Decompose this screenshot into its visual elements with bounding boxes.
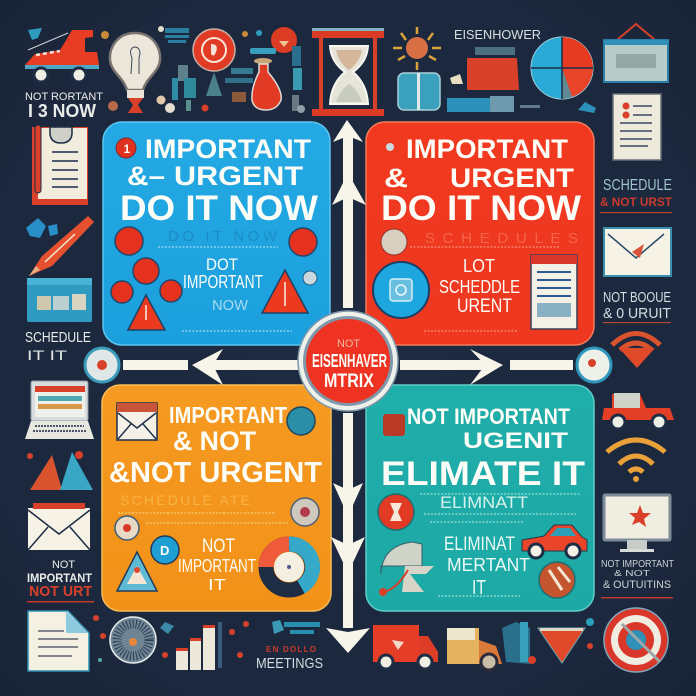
heading: important urgent do it now: IMPORTANT: [145, 134, 312, 164]
heading: not important urgent eliminate it: ELIMATE IT: [381, 455, 585, 493]
icon: window: [398, 73, 440, 110]
heading: important urgent do it now: URGENT: [450, 163, 575, 193]
label: not important right: NOT IMPORTANT: [601, 559, 674, 570]
icon: bottom clutter: [93, 615, 320, 662]
label: not schedule: [603, 289, 671, 323]
icon: red truck: [373, 625, 438, 669]
dotted rules: [420, 494, 580, 596]
icon: wifi orange: [607, 440, 665, 480]
label: schedule not urgent: [600, 177, 673, 213]
label: not schedule: & 0 URUIT: [603, 305, 671, 322]
heading: important urgent do it now: &: [384, 163, 408, 193]
heading: important not urgent: &NOT URGENT: [109, 457, 322, 489]
icon: bar chart: [176, 622, 222, 670]
text: not important it: NOT: [202, 536, 235, 557]
text: not important it: IT: [208, 577, 226, 594]
heading: important urgent do it now: &–: [127, 161, 165, 191]
icon: number badge: [116, 138, 136, 158]
text: lot schedule urgent: SCHEDDLE: [439, 277, 520, 297]
panel: not important not urgent (teal): [366, 385, 594, 611]
subheading: faded do it now: DO IT NOW: [168, 228, 278, 245]
icon: machine: [379, 542, 434, 596]
icon: triangle: [117, 552, 157, 591]
subheading: eliminate: ELIMNATT: [440, 493, 528, 512]
arrow: vertical axis down: [326, 413, 370, 653]
label: not important right: [601, 559, 674, 598]
label: meetings: MEETINGS: [256, 655, 323, 672]
icon: red diamond: [619, 348, 655, 368]
icon: blue badge: [287, 407, 315, 435]
icon: number badge: 1: [124, 142, 130, 156]
heading: not important urgent eliminate it: [381, 404, 585, 493]
heading: important not urgent: IMPORTANT: [169, 402, 287, 428]
label: not important now: I 3 NOW: [28, 101, 96, 121]
heading: important urgent do it now: URGENT: [174, 161, 304, 191]
label: not important right: & NOT: [614, 569, 650, 578]
arrow: horizontal right: [400, 349, 573, 385]
icon: triangles: [27, 451, 93, 490]
icon: red badge: [378, 494, 414, 530]
heading: important urgent do it now: [381, 134, 581, 228]
icon: envelope right: [604, 228, 671, 276]
icon: top-left decorative clutter: [28, 26, 305, 113]
label: not important not urgent: [27, 559, 94, 602]
text: lot schedule urgent: LOT: [463, 256, 495, 276]
center badge: eisenhower matrix: MTRIX: [324, 371, 374, 392]
icon: clipboard: [32, 125, 88, 205]
text: not important it: IMPORTANT: [178, 556, 256, 576]
icon: pen: [29, 216, 94, 276]
label: schedule it: SCHEDULE: [25, 329, 91, 346]
center badge: eisenhower matrix: [298, 311, 398, 411]
icon: teal card: [27, 278, 92, 322]
icon: small red circle: [271, 27, 297, 53]
panel: important not urgent (orange): [102, 385, 331, 611]
text: dot important now: [183, 255, 263, 314]
heading: important urgent do it now: DO IT NOW: [381, 189, 581, 228]
icon: truck top left: [25, 30, 99, 82]
icon: blue scraps: [26, 218, 58, 238]
icon: small grey badge: [303, 271, 317, 285]
text: lot schedule urgent: URENT: [457, 296, 512, 317]
text: eliminate important it: MERTANT: [447, 555, 530, 575]
icon: monitor: [604, 495, 670, 552]
icon: red badges: [111, 227, 317, 303]
subheading: faded schedules: SCHEDULES: [425, 230, 578, 247]
center badge: eisenhower matrix: NOT: [337, 338, 360, 350]
arrow: vertical axis up: [332, 120, 366, 308]
text: dot important now: IMPORTANT: [183, 272, 263, 292]
heading: not important urgent eliminate it: NOT IMPORTANT: [407, 404, 570, 429]
heading: important not urgent: [109, 402, 322, 489]
heading: important urgent do it now: IMPORTANT: [406, 134, 569, 164]
label: schedule it: IT IT: [27, 347, 68, 363]
label: not important not urgent: NOT URT: [29, 583, 92, 600]
icon: blue d badge: D: [160, 543, 169, 558]
icon: teal clutter: [502, 618, 594, 664]
icon: red flask: [250, 48, 281, 110]
icon: laptop: [25, 381, 94, 439]
text: eliminate important it: [444, 534, 530, 599]
text: dot important now: DOT: [206, 255, 238, 274]
icon: bottom clutter: EN DOLLO: [266, 645, 316, 654]
icon: document: [531, 255, 577, 329]
icon: mail: [117, 403, 157, 440]
panel: important and urgent (red): [366, 122, 594, 345]
center badge: eisenhower matrix: EISENHAVER: [312, 351, 387, 371]
dotted rules: [118, 513, 288, 523]
icon: blue strip: [447, 96, 596, 113]
dotted rules: [158, 247, 292, 331]
label: not important now: NOT RORTANT: [25, 91, 103, 103]
icon: yellow truck: [447, 628, 502, 670]
dotted rules: [410, 247, 560, 331]
text: eliminate important it: ELIMINAT: [444, 534, 515, 555]
label: not important now: [25, 91, 103, 121]
icon: donut chart: [266, 544, 313, 590]
icon: blue d badge: [151, 536, 179, 564]
label: not important not urgent: NOT: [52, 559, 75, 571]
icon: document top right: [613, 94, 661, 160]
icon: warning triangles: [128, 270, 308, 330]
icon: sun: [393, 27, 441, 70]
icon: blue button: [373, 262, 429, 318]
icon: inverted triangle: [538, 628, 585, 663]
heading: important urgent do it now: [120, 134, 318, 228]
icon: car: [522, 525, 587, 558]
label: eisenhower: EISENHOWER: [454, 27, 541, 42]
icon: small red tag: [383, 414, 405, 436]
icon: ball: [539, 562, 575, 598]
label: not schedule: NOT BOOUE: [603, 289, 671, 306]
heading: important not urgent: & NOT: [173, 426, 256, 456]
panel: important and urgent (blue): [103, 122, 330, 345]
arrow: horizontal left: [123, 349, 298, 385]
text: eliminate important it: IT: [472, 577, 486, 599]
label: schedule not urgent: SCHEDULE: [603, 177, 672, 194]
heading: important urgent do it now: DO IT NOW: [120, 189, 318, 228]
icon: grey badge: [381, 229, 407, 255]
text: dot important now: NOW: [212, 297, 249, 314]
label: schedule it: [25, 329, 91, 363]
icon: target: [604, 608, 668, 672]
icon: light bulb: [110, 33, 160, 113]
icon: pie chart: [531, 37, 593, 99]
heading: not important urgent eliminate it: UGENIT: [463, 428, 569, 453]
icon: car right: [602, 393, 674, 429]
icon: right axis node: [577, 348, 611, 382]
icon: hanging sign: [604, 24, 668, 82]
icon: red folder: [450, 47, 519, 90]
label: not important not urgent: IMPORTANT: [27, 571, 93, 585]
icon: red circle: [193, 29, 235, 96]
icon: document bottom left: [28, 611, 89, 671]
text: lot schedule urgent: [439, 256, 520, 317]
label: schedule not urgent: & NOT URST: [600, 195, 673, 209]
icon: grey badges: [115, 498, 319, 540]
text: not important it: [178, 536, 256, 594]
icon: dial: [110, 617, 156, 663]
subheading: faded schedule: SCHEDULE ATE: [120, 492, 250, 508]
icon: envelope: [28, 503, 90, 550]
icon: hourglass: [312, 28, 384, 116]
label: not important right: & OUTUITINS: [603, 579, 671, 591]
icon: left axis node: [85, 348, 119, 382]
icon: wifi red top: [612, 334, 660, 350]
icon: small badge: [386, 143, 394, 151]
